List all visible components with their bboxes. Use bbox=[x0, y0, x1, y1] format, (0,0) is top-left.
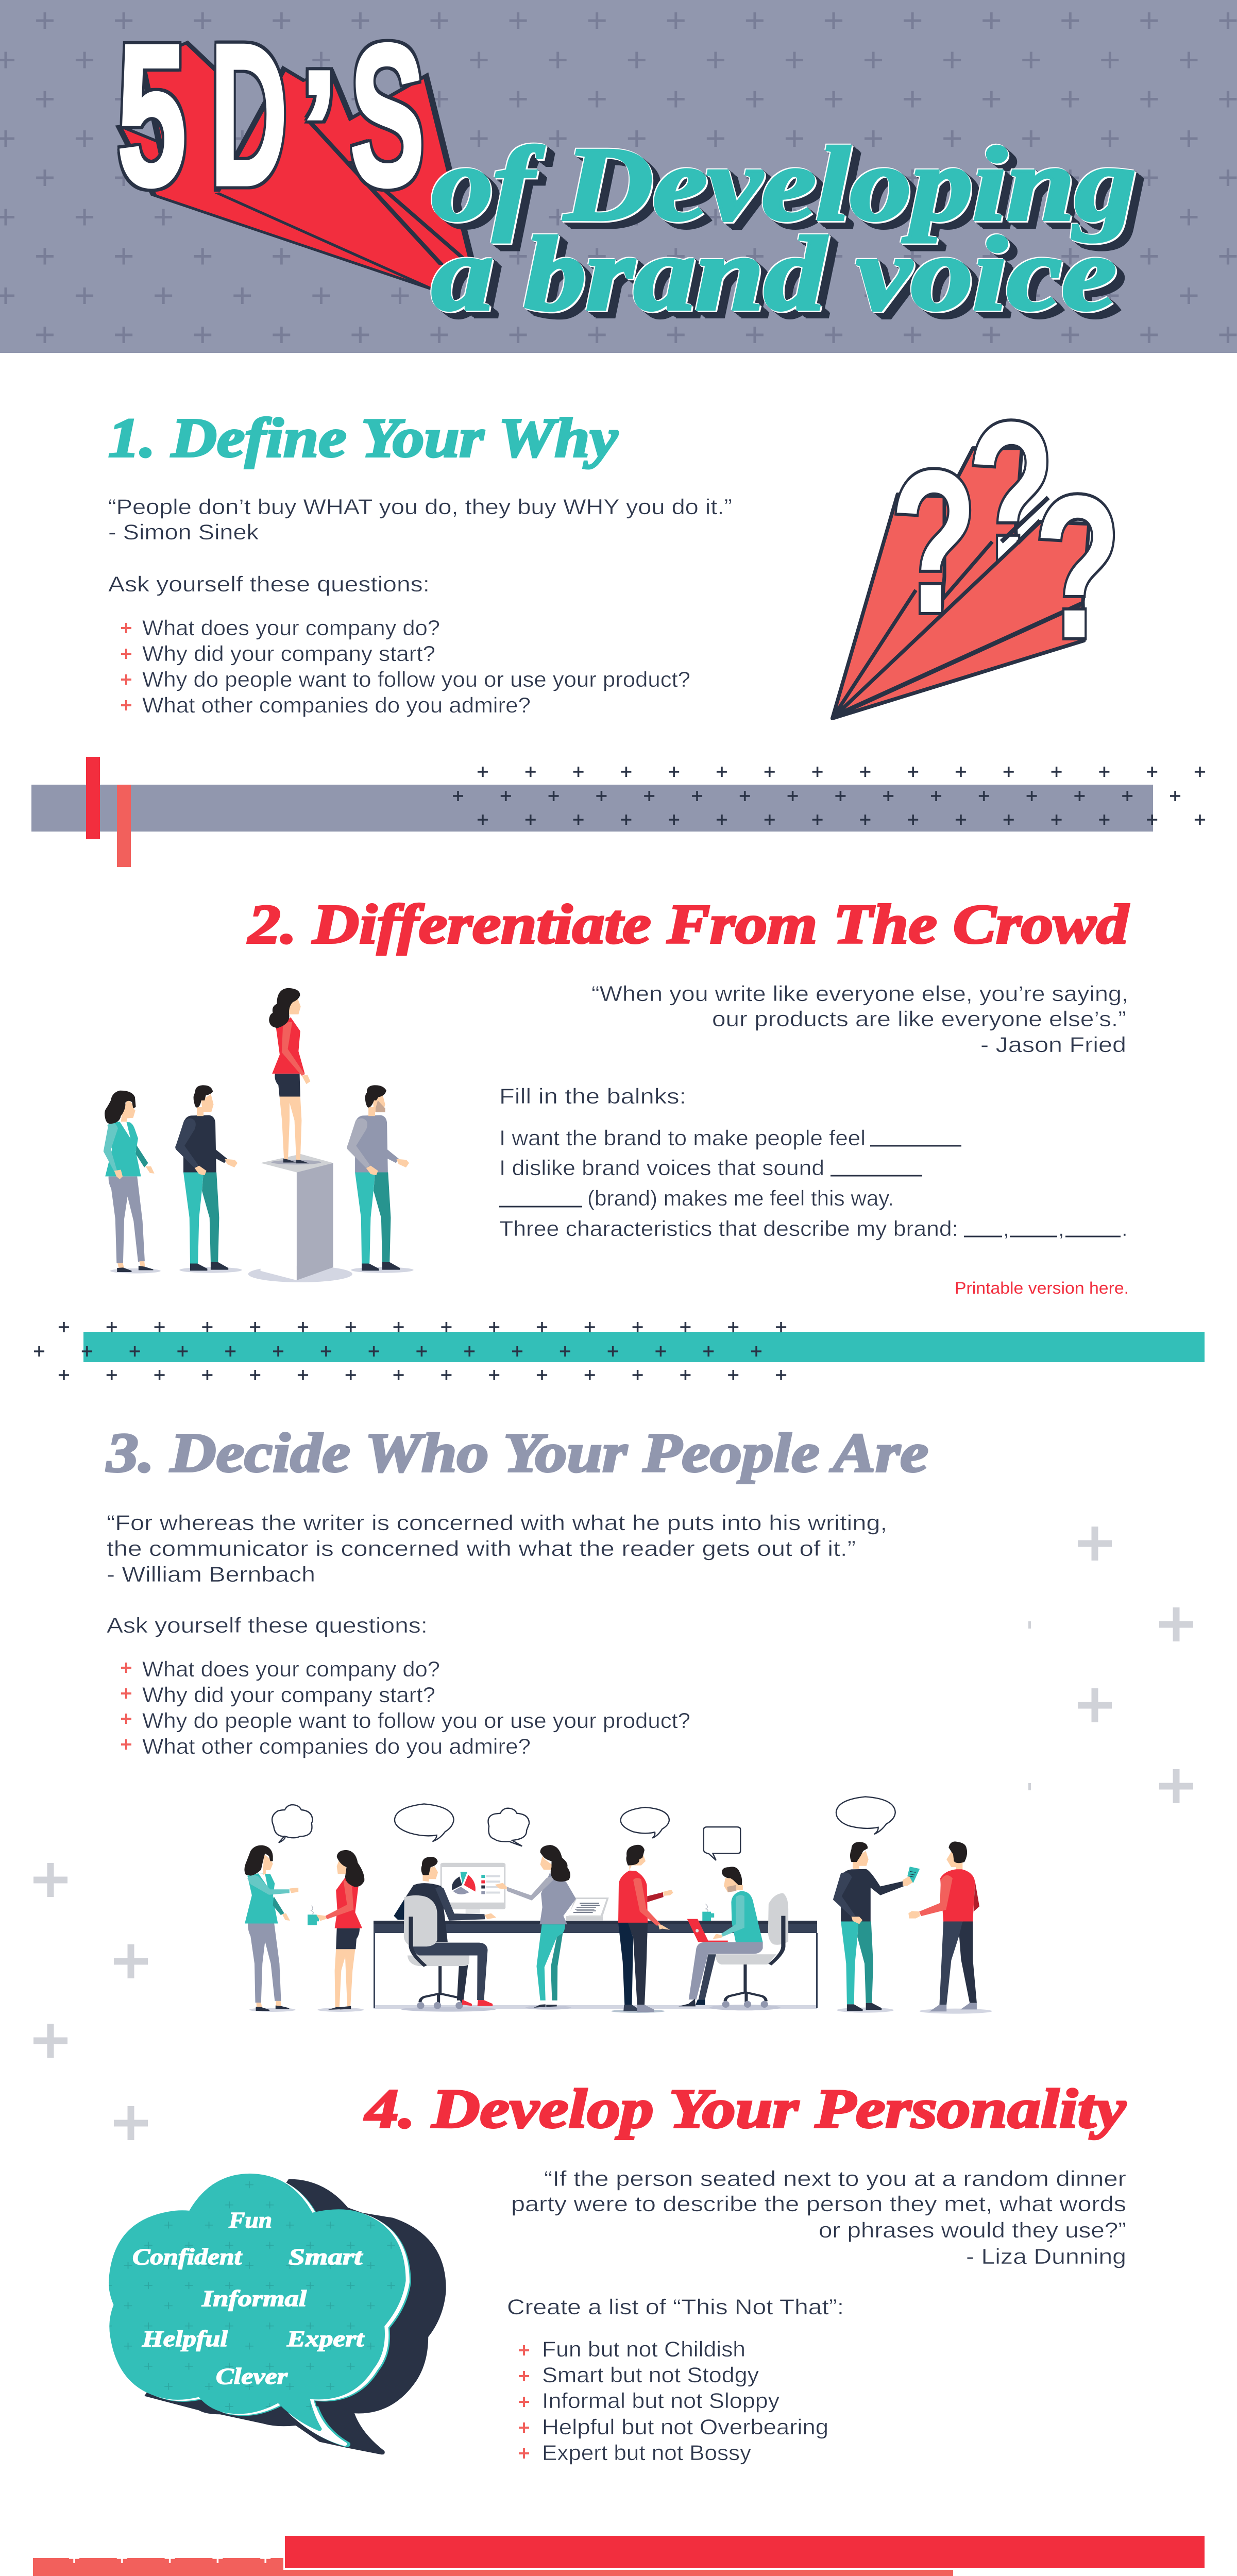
title: 5D'S bbox=[117, 2, 425, 228]
person: woman in red with cup bbox=[308, 1850, 364, 2012]
link: printable version: Printable version here. bbox=[955, 1279, 1129, 1297]
heading 1: 1. Define Your Why bbox=[108, 408, 618, 469]
divider 3: red and salmon bars with crosses bbox=[33, 2534, 1205, 2576]
person: woman in red on pedestal bbox=[269, 988, 310, 1163]
title: of Developing a brand voice bbox=[432, 126, 1136, 332]
speech bubbles bbox=[272, 1804, 529, 1846]
bubble words: Clever bbox=[216, 2364, 288, 2389]
people group right bbox=[611, 1797, 992, 2014]
person: bearded man in grey sweater bbox=[347, 1085, 414, 1273]
bubble words: Confident bbox=[132, 2244, 243, 2269]
text: fill in the blanks: Three characteristics that describe my brand: bbox=[499, 1216, 958, 1241]
quote: Liza Dunning: party were to describe the person they met, what words bbox=[511, 2192, 1126, 2216]
this-not-that list: Expert but not Bossy bbox=[542, 2441, 751, 2465]
banner bbox=[0, 0, 1237, 353]
person: woman in grey bbox=[495, 1845, 576, 2010]
quote: Simon Sinek bbox=[108, 495, 732, 544]
divider 2: teal bar with crosses bbox=[34, 1321, 1205, 1381]
title: 5D'S: S bbox=[350, 3, 425, 228]
question list: What does your company do? bbox=[142, 1657, 440, 1681]
monitor with pie chart bbox=[440, 1863, 505, 1914]
question list: What other companies do you admire? bbox=[142, 1734, 531, 1758]
quote: Simon Sinek: - Simon Sinek bbox=[108, 520, 259, 544]
bubble words: Smart bbox=[289, 2244, 363, 2269]
divider 1: grey bar with red stripes and crosses bbox=[31, 757, 1206, 867]
question list: Why did your company start? bbox=[142, 1683, 435, 1707]
text: fill in the blanks: , bbox=[1003, 1216, 1009, 1241]
heading 2: 2. Differentiate From The Crowd bbox=[247, 894, 1129, 955]
text: fill in the blanks: , bbox=[1058, 1216, 1064, 1241]
panel: section 4 develop your personality bbox=[109, 2078, 1126, 2465]
bubble words: Informal bbox=[201, 2286, 307, 2311]
quote: Liza Dunning bbox=[511, 2166, 1126, 2268]
text: fill in the blanks: . bbox=[1122, 1216, 1128, 1241]
text: fill in the blanks: Fill in the balnks: bbox=[499, 1084, 686, 1108]
question list bbox=[121, 616, 690, 717]
bubble words: Helpful bbox=[142, 2326, 228, 2351]
heading 4: 4. Develop Your Personality bbox=[364, 2078, 1126, 2140]
title: of Developing a brand voice: a brand voice bbox=[432, 215, 1116, 332]
illustration: office team bbox=[244, 1797, 992, 2014]
title: 5D'S: ’ bbox=[301, 37, 337, 221]
question list: Why do people want to follow you or use your product? bbox=[142, 1708, 690, 1733]
person: man in red at desk bbox=[611, 1845, 673, 2013]
person: man seated at monitor bbox=[394, 1857, 496, 2012]
panel: section 3 decide who your people are bbox=[33, 1422, 1193, 2140]
text: fill in the blanks bbox=[499, 1084, 1128, 1241]
quote: Jason Fried: “When you write like everyone else, you’re saying, bbox=[591, 981, 1128, 1006]
this-not-that list bbox=[519, 2337, 828, 2465]
illustration: crowd and pedestal bbox=[104, 988, 414, 1282]
panel: section 1 define your why bbox=[108, 380, 1121, 718]
quote: Simon Sinek: “People don’t buy WHAT you do, they buy WHY you do it.” bbox=[108, 495, 732, 519]
text: ask yourself: Ask yourself these questions: bbox=[108, 572, 430, 596]
title graphic: red beams behind 5D'S bbox=[118, 43, 472, 290]
text: fill in the blanks: I want the brand to make people feel bbox=[499, 1126, 866, 1150]
title: of Developing a brand voice: of Developing bbox=[432, 126, 1136, 243]
quote: Liza Dunning: or phrases would they use?” bbox=[819, 2218, 1126, 2242]
quote: William Bernbach bbox=[107, 1511, 887, 1586]
question list: Why do people want to follow you or use your product? bbox=[142, 667, 690, 691]
quote: Jason Fried: our products are like everyone else’s.” bbox=[712, 1007, 1126, 1031]
decorative grey crosses bbox=[33, 1527, 1193, 2140]
person: man in red, back view bbox=[908, 1841, 992, 2014]
icon: question marks with red beams: ? bbox=[1034, 453, 1121, 681]
this-not-that list: Fun but not Childish bbox=[542, 2337, 745, 2361]
this-not-that list: Smart but not Stodgy bbox=[542, 2363, 759, 2387]
quote: William Bernbach: the communicator is concerned with what the reader gets out of it.” bbox=[107, 1536, 856, 1561]
heading 3: 3. Decide Who Your People Are bbox=[106, 1422, 928, 1484]
question list: Why did your company start? bbox=[142, 641, 435, 666]
bubble words bbox=[132, 2208, 365, 2389]
title: 5D'S: D bbox=[210, 2, 287, 228]
icon: question marks with red beams: ? bbox=[968, 380, 1055, 607]
quote: William Bernbach: - William Bernbach bbox=[107, 1562, 315, 1586]
quote: Jason Fried: - Jason Fried bbox=[980, 1032, 1126, 1057]
laptop bbox=[566, 1897, 609, 1921]
question list bbox=[121, 1657, 690, 1758]
text: fill in the blanks: (brand) makes me feel this way. bbox=[587, 1186, 894, 1210]
text: fill in the blanks: I dislike brand voices that sound bbox=[499, 1156, 824, 1180]
illustration: speech bubble bbox=[109, 2174, 446, 2454]
text: create a list: Create a list of “This Not That”: bbox=[507, 2295, 844, 2319]
this-not-that list: Helpful but not Overbearing bbox=[542, 2415, 828, 2439]
this-not-that list: Informal but not Sloppy bbox=[542, 2388, 780, 2413]
icon: question marks with red beams: ? bbox=[890, 428, 977, 656]
question list: What other companies do you admire? bbox=[142, 693, 531, 717]
person: bearded man seated with red laptop bbox=[679, 1867, 788, 2010]
person: woman in teal jacket bbox=[244, 1845, 298, 2012]
person: man in navy holding card bbox=[833, 1842, 920, 2013]
pedestal bbox=[248, 1154, 352, 1282]
question list: What does your company do? bbox=[142, 616, 440, 640]
people group left bbox=[244, 1804, 609, 2012]
person: man in navy sweater bbox=[175, 1085, 242, 1273]
bubble words: Expert bbox=[286, 2326, 365, 2351]
bubble words: Fun bbox=[228, 2208, 272, 2233]
quote: Liza Dunning: “If the person seated next to you at a random dinner bbox=[544, 2166, 1126, 2191]
title: 5D'S: 5 bbox=[117, 3, 187, 228]
desk bbox=[374, 1921, 818, 2009]
quote: William Bernbach: “For whereas the writer is concerned with what he puts into his writing, bbox=[107, 1511, 887, 1535]
quote: Liza Dunning: - Liza Dunning bbox=[966, 2244, 1126, 2268]
panel: section 2 differentiate bbox=[104, 894, 1129, 1297]
person: woman in teal jacket bbox=[104, 1091, 161, 1274]
icon: question marks with red beams bbox=[833, 380, 1121, 718]
speech bubbles bbox=[621, 1797, 895, 1860]
text: ask yourself: Ask yourself these questions: bbox=[107, 1613, 428, 1637]
quote: Jason Fried bbox=[591, 981, 1128, 1057]
